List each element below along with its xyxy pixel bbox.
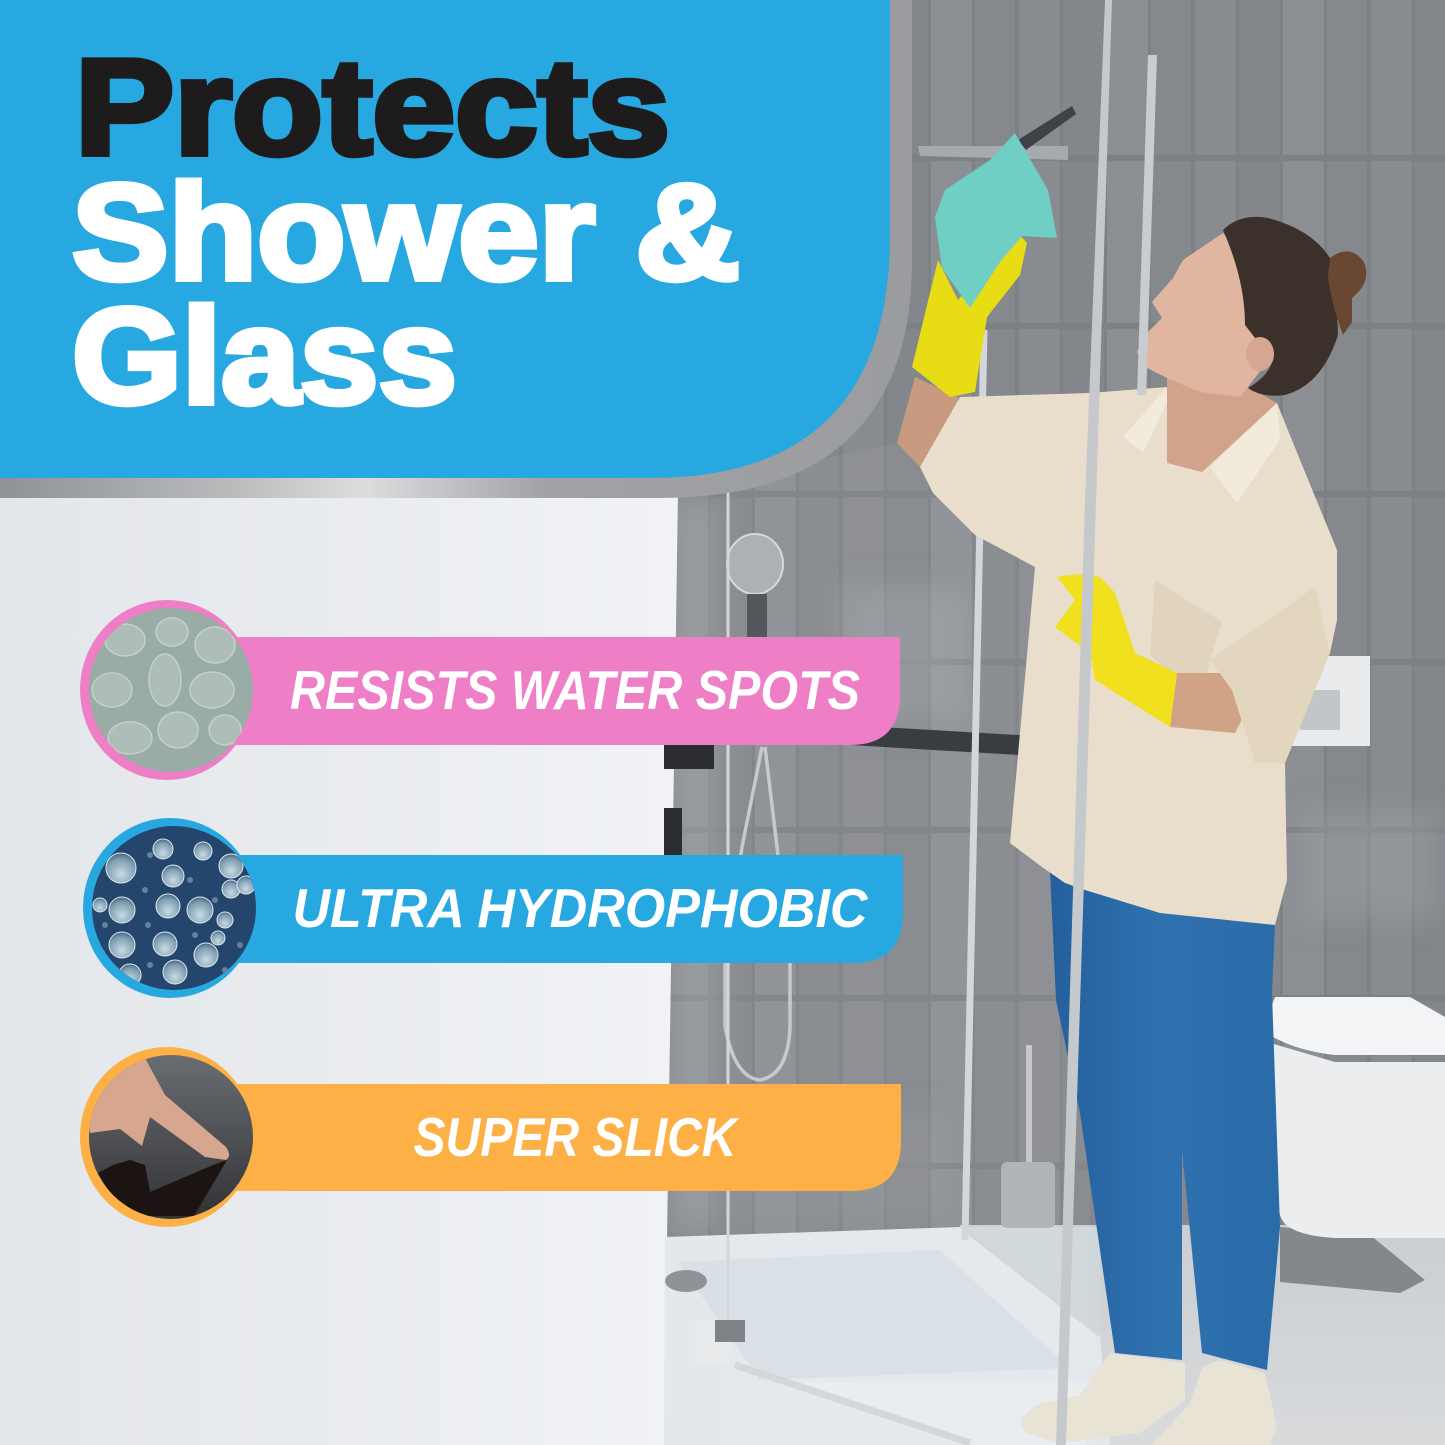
hair [1223, 217, 1338, 396]
shower fixtures [664, 106, 1370, 1228]
bathroom tiled wall background [660, 0, 1445, 1250]
shirt [920, 387, 1337, 925]
feature: super slick [80, 1047, 901, 1230]
collar [1123, 387, 1280, 503]
orange banner [235, 1084, 901, 1191]
title line: Protects: Protects [75, 31, 670, 183]
bathroom floor [960, 1225, 1445, 1445]
raised forearm [897, 377, 958, 467]
pink banner [235, 637, 900, 745]
rubber glove: lower hand [1055, 574, 1177, 727]
ear [1246, 337, 1274, 371]
thumbnail: finger on slick surface [89, 1055, 253, 1219]
cleaning cloth [935, 133, 1057, 308]
orange circle ring [80, 1047, 254, 1227]
title line: Shower &: Shower & [72, 156, 740, 308]
thumbnail: water droplets [92, 826, 256, 990]
wiper on glass [1018, 106, 1076, 150]
shelf [918, 146, 1068, 160]
toilet brush [1001, 1045, 1055, 1228]
glass shower panels [695, 330, 1100, 1445]
orange banner label: SUPER SLICK [414, 1106, 740, 1168]
blue banner label: ULTRA HYDROPHOBIC [292, 877, 869, 939]
rolled sleeve [1210, 587, 1330, 763]
pink circle ring [80, 600, 254, 780]
blue circle ring [83, 818, 257, 998]
jeans [1050, 872, 1280, 1370]
neck [1167, 378, 1277, 472]
blue banner [235, 855, 903, 963]
header rim [0, 0, 912, 498]
title line: Glass: Glass [72, 280, 457, 432]
toilet shadow [1280, 1227, 1425, 1293]
shower tray [664, 1227, 1110, 1445]
pink banner label: RESISTS WATER SPOTS [290, 659, 860, 721]
door hinge clamp [695, 1320, 745, 1363]
woman [897, 133, 1366, 1445]
glass door edges [1056, 0, 1157, 1445]
icon: shower head [727, 534, 783, 638]
hair bun [1328, 251, 1366, 335]
black hinges [664, 745, 714, 856]
shower drain [665, 1270, 707, 1292]
shoes [1020, 1353, 1277, 1445]
door handle bar [850, 727, 1070, 758]
wall niche [1288, 656, 1370, 746]
shower hose [725, 747, 790, 1080]
title [72, 31, 740, 432]
white wall [0, 490, 678, 1445]
shirt pocket fold [1150, 580, 1222, 700]
feature: ultra hydrophobic [83, 818, 903, 1000]
rubber glove: raised hand [912, 233, 1027, 397]
face [1137, 233, 1270, 397]
feature: resists water spots [80, 600, 900, 780]
header panel [0, 0, 890, 478]
toilet [1260, 997, 1445, 1293]
bent arm [1170, 673, 1245, 733]
thumbnail: water spots [89, 608, 253, 772]
